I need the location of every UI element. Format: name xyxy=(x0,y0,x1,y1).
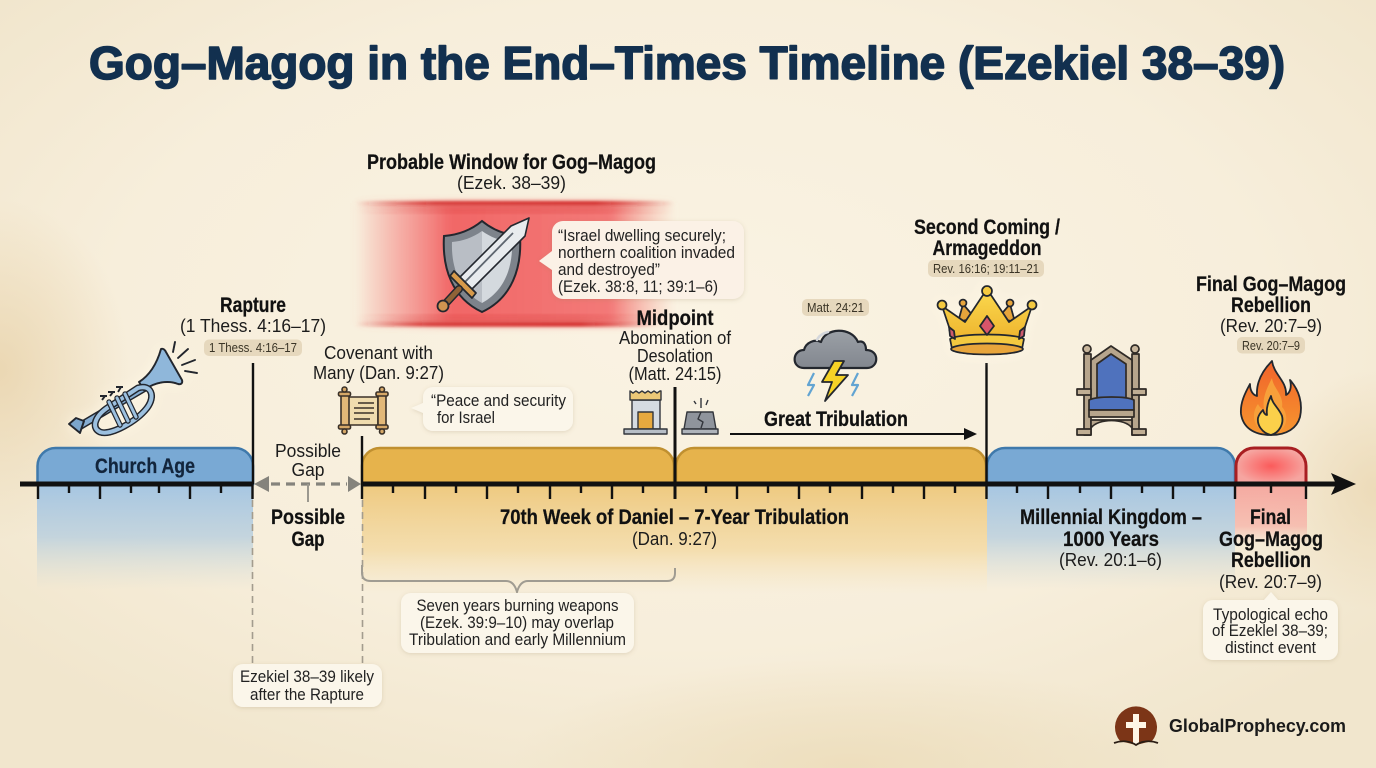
window heading: Probable Window for Gog–Magog xyxy=(367,151,656,174)
window reference: (Ezek. 38–39) xyxy=(457,172,566,193)
logo: GlobalProphecy.com xyxy=(1114,706,1346,745)
label: possible gap below: Gap xyxy=(292,528,324,551)
label: final rebellion top: (Rev. 20:7–9) xyxy=(1220,315,1322,336)
red window band xyxy=(355,202,675,326)
lower fade: church age xyxy=(37,484,253,590)
callout: Israel dwelling securely xyxy=(539,221,744,299)
callout: seven years burning weapons: Tribulation and early Millennium xyxy=(409,630,626,649)
pill: Rev 16:16: Rev. 16:16; 19:11–21 xyxy=(933,262,1039,276)
callout: Israel dwelling securely: (Ezek. 38:8, 11; 39:1–6) xyxy=(558,277,718,296)
label: final rebellion bottom: (Rev. 20:7–9) xyxy=(1219,571,1322,592)
bar: church age: Church Age xyxy=(95,455,195,478)
callout: likely after the rapture xyxy=(233,664,382,707)
callout: peace and security: for Israel xyxy=(437,408,495,427)
arrow: possible gap xyxy=(254,476,361,502)
marker: midpoint line xyxy=(674,387,676,499)
timeline axis with ticks xyxy=(20,473,1356,499)
callout: likely after the rapture: after the Rapture xyxy=(250,685,364,704)
panel: probable window for Gog-Magog xyxy=(355,151,744,326)
rapture heading: Rapture xyxy=(220,294,286,317)
pill: 1 Thess reference: 1 Thess. 4:16–17 xyxy=(209,341,297,355)
label: second coming: Second Coming / xyxy=(914,216,1060,239)
bar: millennial kingdom xyxy=(987,448,1235,484)
icon: cross and book xyxy=(1114,706,1158,745)
label: second coming xyxy=(914,216,1060,260)
marker: covenant line xyxy=(361,436,363,484)
icon: covenant scroll xyxy=(338,387,388,434)
label: covenant with many: Covenant with xyxy=(324,342,433,363)
label: midpoint: Desolation xyxy=(637,345,713,366)
callout: typological echo: of Ezeklel 38–39; xyxy=(1212,621,1328,640)
label: possible gap below xyxy=(271,506,345,551)
title: Gog–Magog in the End–Times Timeline (Ezekiel 38–39) xyxy=(89,37,1285,89)
label: great tribulation: Great Tribulation xyxy=(764,408,908,431)
label: final rebellion top xyxy=(1196,273,1346,336)
lower fade: millennium xyxy=(987,484,1235,590)
label: possible gap above: Gap xyxy=(292,459,324,480)
icon: shield and sword xyxy=(438,218,529,312)
label: 70th week xyxy=(500,506,849,549)
callout: peace and security xyxy=(411,387,573,431)
label: midpoint xyxy=(619,307,732,384)
icon: throne xyxy=(1077,345,1146,435)
callout: Israel dwelling securely: “Israel dwelling securely; xyxy=(558,226,726,245)
label: final rebellion bottom: Final xyxy=(1250,506,1291,529)
label: final rebellion bottom: Rebellion xyxy=(1231,549,1311,572)
label: final rebellion bottom xyxy=(1219,506,1323,592)
bar: church age xyxy=(38,448,253,484)
label: midpoint: Abomination of xyxy=(619,327,732,348)
icon: temple xyxy=(624,391,667,434)
label: 70th week: 70th Week of Daniel – 7-Year Tribulation xyxy=(500,506,849,529)
guide: covenant dashed line xyxy=(362,500,364,664)
icon: broken altar xyxy=(682,398,718,434)
label: final rebellion top: Rebellion xyxy=(1231,294,1311,317)
callout: likely after the rapture: Ezekiel 38–39 likely xyxy=(240,667,374,686)
callout: seven years burning weapons xyxy=(401,593,634,653)
label: possible gap below: Possible xyxy=(271,506,345,529)
pill: Matt 24:21: Matt. 24:21 xyxy=(807,301,864,315)
icon: flame xyxy=(1241,361,1301,435)
icon: storm cloud xyxy=(795,331,876,401)
label: midpoint: Midpoint xyxy=(636,307,714,330)
marker: rapture line xyxy=(252,363,254,484)
bar: 70th week second half xyxy=(676,448,986,484)
callout: typological echo xyxy=(1203,592,1338,660)
bar: final rebellion xyxy=(1236,448,1306,484)
label: second coming: Armageddon xyxy=(932,237,1042,260)
lower fade: final rebellion xyxy=(1235,484,1307,544)
label: covenant with many xyxy=(313,342,444,383)
callout: seven years burning weapons: Seven years burning weapons xyxy=(416,596,618,615)
label: final rebellion bottom: Gog–Magog xyxy=(1219,528,1323,551)
label: millennial kingdom xyxy=(1020,506,1202,570)
icon: crown xyxy=(938,286,1036,354)
logo: GlobalProphecy.com: GlobalProphecy.com xyxy=(1169,715,1346,736)
guide: rapture dashed line xyxy=(252,500,254,664)
label: possible gap above: Possible xyxy=(275,440,341,461)
callout: Israel dwelling securely: northern coalition invaded xyxy=(558,243,735,262)
label: millennial kingdom: 1000 Years xyxy=(1063,528,1159,551)
icon: trumpet xyxy=(69,342,197,433)
callout: seven years burning weapons: (Ezek. 39:9–10) may overlap xyxy=(420,613,614,632)
brace: seven years xyxy=(362,565,675,592)
label: millennial kingdom: Millennial Kingdom – xyxy=(1020,506,1202,529)
pill: Rev 20:7-9: Rev. 20:7–9 xyxy=(1242,339,1300,353)
rapture heading: (1 Thess. 4:16–17) xyxy=(180,315,326,336)
arrow: great tribulation xyxy=(730,428,977,440)
label: midpoint: (Matt. 24:15) xyxy=(628,363,722,384)
rapture heading xyxy=(180,294,326,336)
callout: Israel dwelling securely: and destroyed” xyxy=(558,260,660,279)
label: covenant with many: Many (Dan. 9:27) xyxy=(313,362,444,383)
callout: peace and security: “Peace and security xyxy=(431,391,566,410)
label: millennial kingdom: (Rev. 20:1–6) xyxy=(1059,549,1162,570)
marker: second coming line xyxy=(985,363,988,484)
label: final rebellion top: Final Gog–Magog xyxy=(1196,273,1346,296)
label: 70th week: (Dan. 9:27) xyxy=(632,528,717,549)
callout: typological echo: Typological echo xyxy=(1213,605,1328,624)
callout: typological echo: distinct event xyxy=(1225,638,1316,657)
bar: 70th week first half xyxy=(362,448,674,484)
lower fade: 70th week xyxy=(362,484,987,594)
label: possible gap above xyxy=(275,440,341,480)
